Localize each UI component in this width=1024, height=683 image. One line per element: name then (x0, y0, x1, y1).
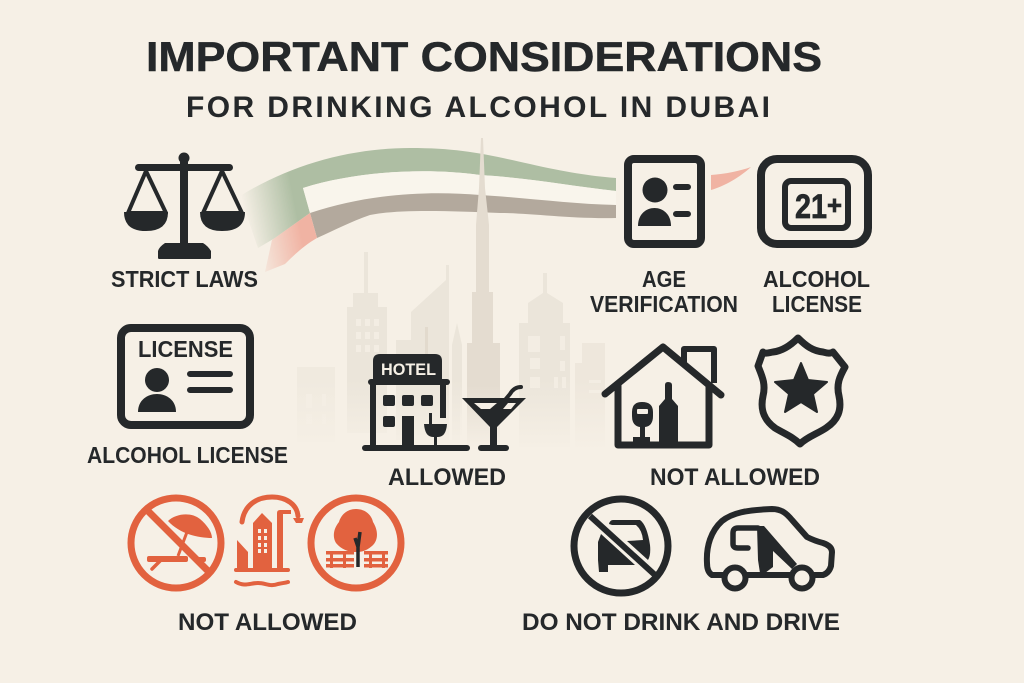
label: LICENSE (772, 291, 862, 317)
panel: alcohol license 21+ (761, 159, 870, 317)
panel: not allowed at home or police (605, 338, 845, 491)
icon: waterfront building (234, 497, 304, 585)
panel: strict laws (111, 152, 258, 292)
subtitle: FOR DRINKING ALCOHOL IN DUBAI (186, 91, 770, 124)
icon: no car (574, 499, 668, 593)
label: DO NOT DRINK AND DRIVE (522, 609, 840, 636)
icon: police badge (758, 338, 845, 444)
label: NOT ALLOWED (650, 464, 820, 491)
label (763, 266, 870, 317)
icon: license card (121, 328, 250, 425)
tower fade (460, 385, 506, 451)
icon: park (311, 498, 401, 588)
icon: license card: LICENSE (138, 336, 233, 362)
icon: 21+ card: + (827, 190, 842, 220)
label: VERIFICATION (590, 291, 738, 317)
icon: hotel (362, 354, 470, 451)
icon: martini glass (462, 387, 526, 451)
panel: not allowed in public (131, 497, 401, 636)
skyline background (280, 252, 620, 452)
burj tower (467, 138, 500, 450)
icon: 21+ card: 21 (795, 188, 827, 226)
panel: alcohol license (87, 328, 288, 468)
label: ALCOHOL (763, 266, 870, 292)
icon: hotel: HOTEL (381, 360, 436, 379)
icon: id card (628, 159, 701, 244)
icon: house with wine and bottle (605, 347, 721, 445)
icon: scales (124, 152, 245, 259)
label: ALLOWED (388, 464, 506, 491)
label: ALCOHOL LICENSE (87, 442, 288, 468)
label: NOT ALLOWED (178, 609, 357, 636)
panel: allowed venues (362, 354, 526, 491)
label: STRICT LAWS (111, 266, 258, 292)
icon: no beach (131, 498, 221, 588)
icon: 21+ card (761, 159, 868, 244)
title: IMPORTANT CONSIDERATIONS (146, 33, 822, 80)
building windows (306, 319, 601, 424)
panel: age verification (590, 159, 738, 317)
flag red fragment (711, 167, 751, 190)
icon: car (707, 509, 832, 588)
UAE flag ribbon (240, 148, 616, 272)
label: AGE (642, 266, 686, 292)
panel: do not drink and drive (522, 499, 840, 636)
label (590, 266, 738, 317)
